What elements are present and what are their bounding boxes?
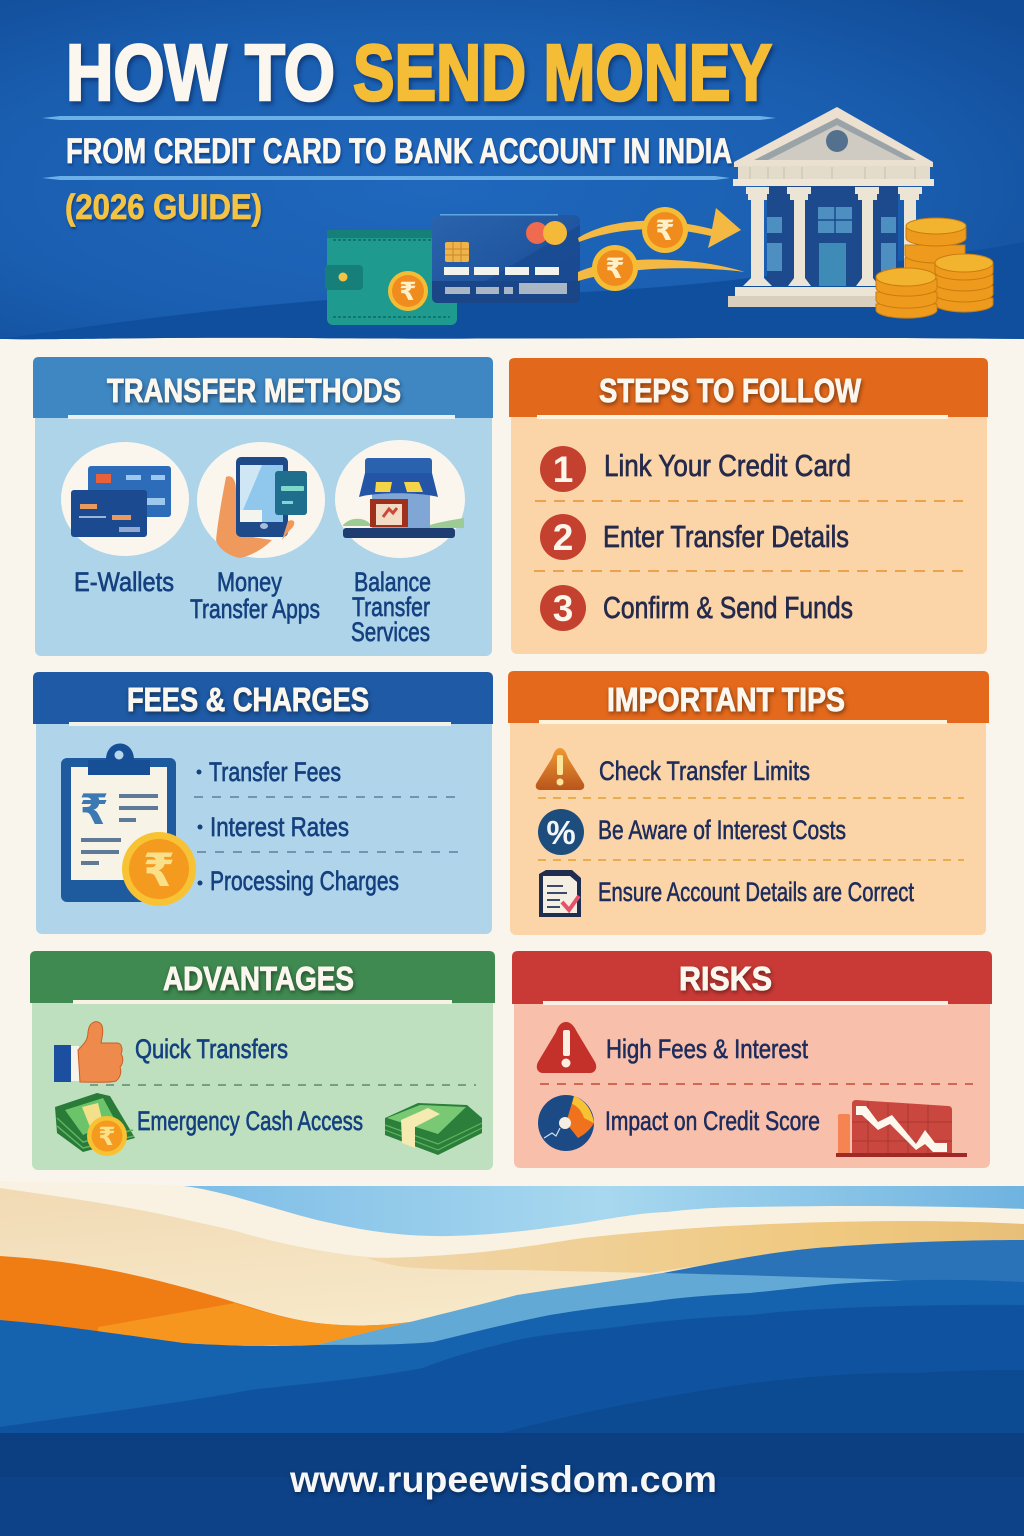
tip: transfer limits	[536, 748, 810, 790]
fee item: transfer fees: Transfer Fees	[209, 757, 341, 787]
section header: risks	[512, 951, 992, 1004]
icon: clipboard with coin: ₹	[79, 786, 109, 833]
section title: steps: STEPS TO FOLLOW	[599, 372, 862, 409]
icon: phone in hand	[197, 442, 325, 558]
section header: fees	[33, 672, 493, 724]
risk: credit score	[538, 1095, 967, 1157]
step 2	[540, 514, 849, 560]
footer waves	[0, 1181, 1024, 1536]
icon: lower coin	[592, 245, 638, 291]
year tag: (2026 GUIDE)	[65, 188, 262, 227]
panel: transfer methods	[33, 357, 493, 656]
risk: high fees: High Fees & Interest	[606, 1034, 808, 1064]
icon: wallet	[325, 230, 457, 325]
step 3: Confirm & Send Funds	[603, 590, 853, 625]
arrow: upper money flow	[578, 208, 741, 248]
panel: important tips	[508, 671, 989, 935]
step 1	[540, 446, 851, 492]
header banner	[0, 0, 1024, 339]
title: HOW TO	[66, 28, 335, 117]
label: balance transfer services: Services	[351, 617, 430, 647]
section title: advantages: ADVANTAGES	[163, 960, 354, 997]
icon: wallet coin	[388, 271, 428, 311]
icon: bank building	[728, 107, 934, 307]
tip: transfer limits: Check Transfer Limits	[599, 756, 810, 786]
title: SEND MONEY	[353, 28, 772, 117]
panel: fees and charges	[33, 672, 493, 934]
section header: steps	[509, 358, 988, 417]
section header: transfer methods	[33, 357, 493, 418]
tip: account details: Ensure Account Details are Correct	[598, 877, 914, 907]
label: balance transfer services: Balance	[354, 567, 431, 597]
advantage: quick transfers	[54, 1022, 288, 1082]
footer website url: www.rupeewisdom.com	[289, 1459, 717, 1500]
title	[66, 28, 772, 117]
panel: steps to follow	[509, 358, 988, 654]
step 1: 1	[553, 449, 573, 490]
icon: e-wallets cards	[61, 442, 189, 556]
fee item: interest rates: Interest Rates	[210, 812, 349, 842]
section title: risks: RISKS	[679, 960, 772, 997]
step 1: Link Your Credit Card	[604, 448, 851, 483]
section header: tips	[508, 671, 989, 723]
advantage: quick transfers: Quick Transfers	[135, 1034, 288, 1064]
tip: interest costs: %	[546, 814, 576, 851]
label: money transfer apps: Transfer Apps	[190, 594, 320, 624]
subtitle: FROM CREDIT CARD TO BANK ACCOUNT IN INDIA	[66, 132, 732, 171]
advantage: emergency cash: Emergency Cash Access	[137, 1106, 363, 1136]
step 3	[540, 585, 853, 631]
fee item: processing charges: Processing Charges	[210, 866, 399, 896]
icon: coin stacks	[876, 218, 993, 318]
step 2: 2	[553, 517, 573, 558]
icon: clipboard with coin: ₹	[143, 844, 175, 896]
risk: high fees	[537, 1022, 808, 1073]
tip: interest costs	[538, 809, 846, 855]
icon: upper coin	[642, 207, 688, 253]
title rule bottom	[42, 176, 730, 180]
title rule top	[42, 116, 776, 120]
label: e-wallets: E-Wallets	[74, 567, 174, 597]
step 3: 3	[553, 588, 573, 629]
section title: tips: IMPORTANT TIPS	[607, 681, 845, 718]
arrow: lower money flow	[578, 260, 745, 281]
risk: credit score: Impact on Credit Score	[605, 1106, 820, 1136]
icon: credit card	[432, 214, 580, 303]
advantage: emergency cash: ₹	[98, 1123, 116, 1151]
label: money transfer apps: Money	[217, 567, 282, 597]
section title: transfer methods: TRANSFER METHODS	[107, 372, 401, 409]
label: balance transfer services: Transfer	[352, 592, 430, 622]
advantage: emergency cash	[55, 1093, 482, 1156]
panel: advantages	[30, 951, 495, 1170]
tip: account details	[539, 870, 914, 917]
icon: clipboard with coin	[61, 744, 196, 906]
icon: wallet coin: ₹	[399, 278, 417, 306]
icon: store	[335, 440, 465, 558]
section title: fees: FEES & CHARGES	[127, 681, 369, 718]
label: balance transfer services	[351, 567, 431, 647]
tip: interest costs: Be Aware of Interest Costs	[598, 815, 846, 845]
panel: risks	[512, 951, 992, 1168]
icon: upper coin: ₹	[655, 215, 675, 246]
label: money transfer apps	[190, 567, 320, 624]
section header: advantages	[30, 951, 495, 1003]
step 2: Enter Transfer Details	[603, 519, 849, 554]
icon: lower coin: ₹	[605, 253, 625, 284]
